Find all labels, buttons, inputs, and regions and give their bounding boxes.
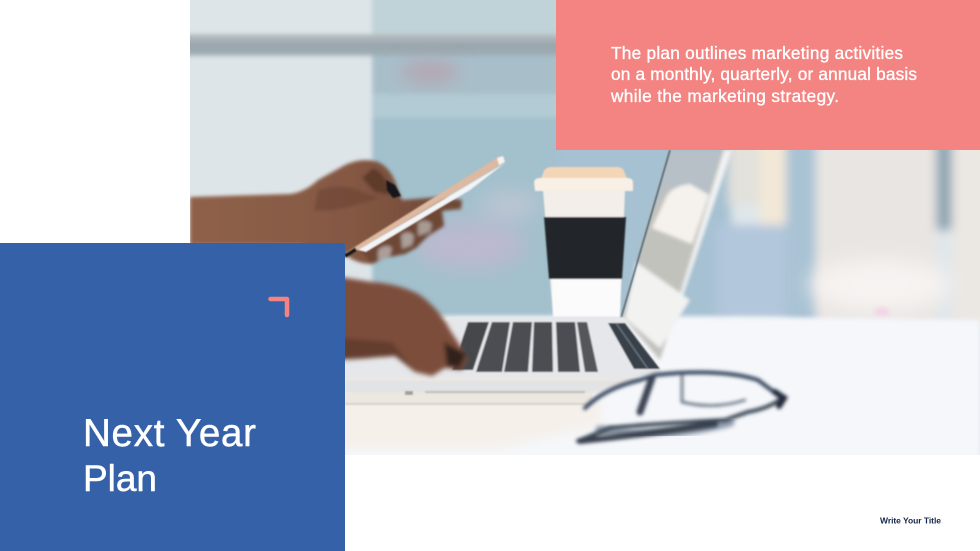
panel: blue title [0,243,345,551]
coffee cup [534,167,633,317]
laptop [345,150,732,405]
phone [345,156,505,256]
icon: coral corner bracket [270,299,287,315]
title: Next Year [83,412,256,455]
description text: while the marketing strategy. [610,86,839,106]
description text: The plan outlines marketing activities [611,43,903,63]
hand and forearm [190,160,462,264]
title: Plan [83,458,157,499]
laptop deck and keyboard [345,317,662,405]
photo: hands, phone, coffee and laptop on a desk [180,0,980,470]
upper hand holding phone [190,156,505,264]
desk surface [340,316,980,470]
description text [610,43,917,106]
description text: on a monthly, quarterly, or annual basis [611,64,917,84]
laptop lid and screen [622,150,732,362]
eyeglasses [578,372,784,441]
footer label: Write Your Title [880,516,941,526]
panel: coral description [556,0,980,150]
title [83,412,256,499]
lower hand typing [340,277,468,376]
photo background: blurred window view [180,0,980,455]
